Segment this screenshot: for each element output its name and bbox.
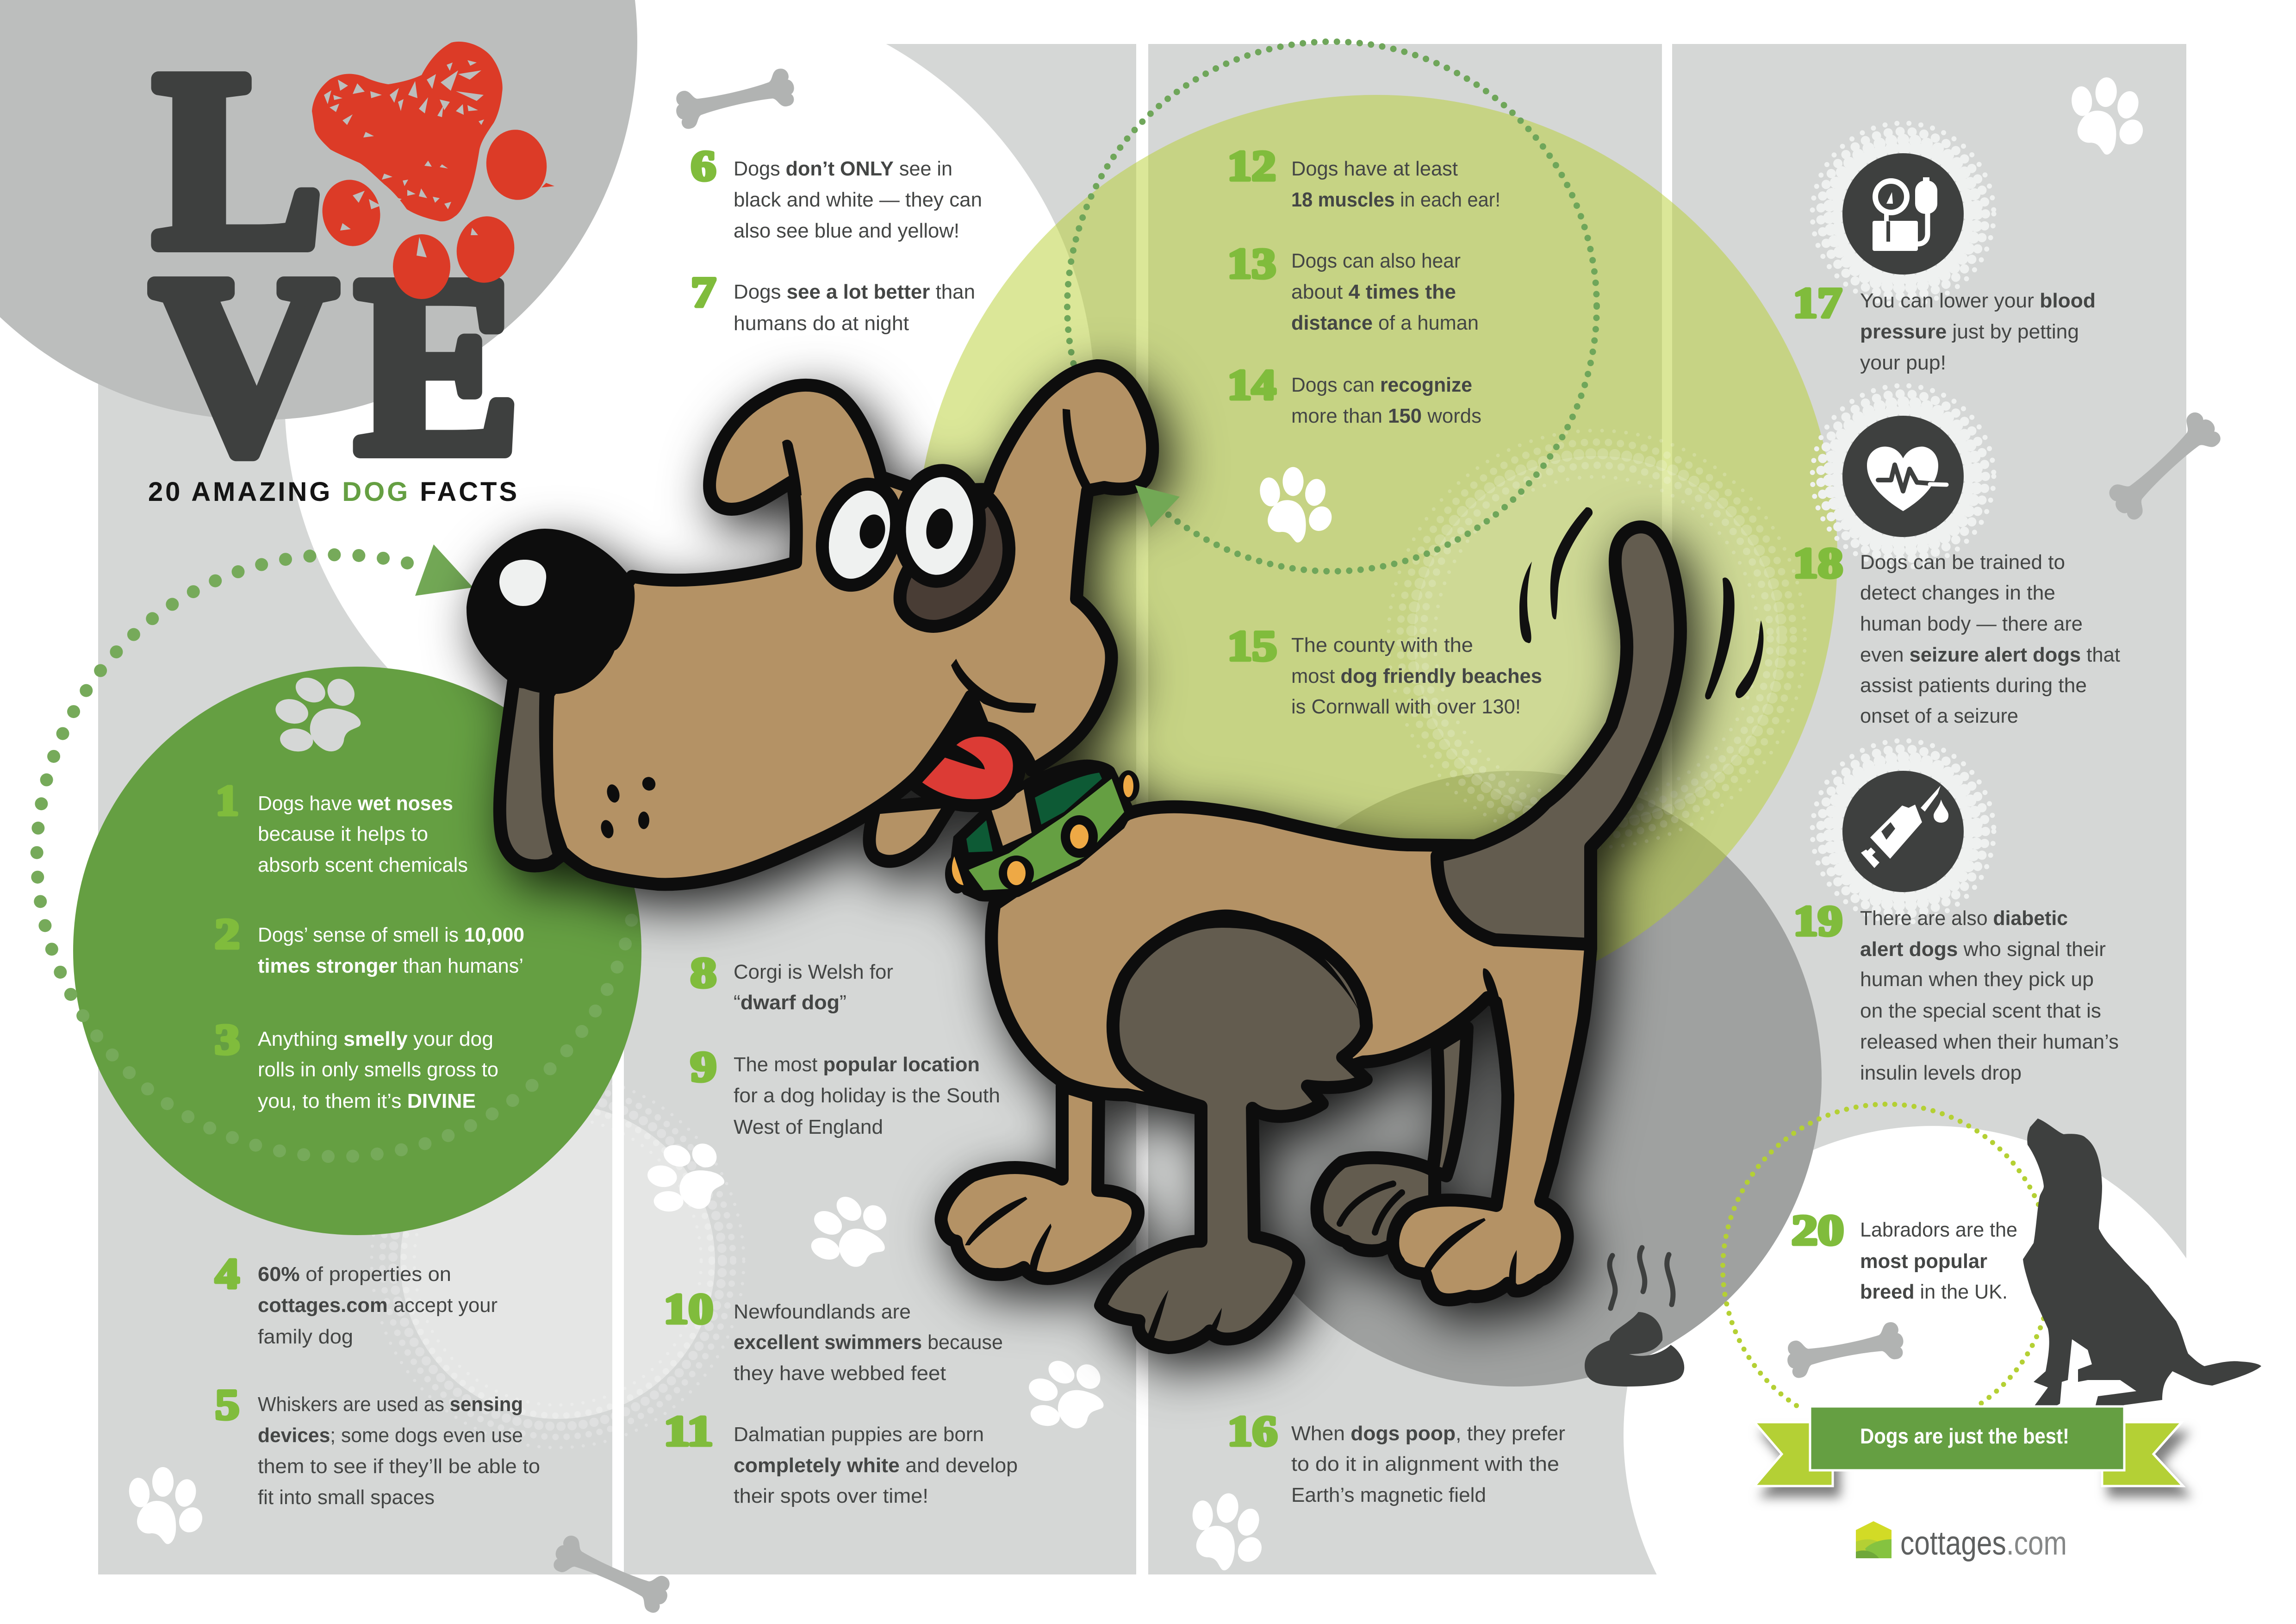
fact 8: 8: [691, 949, 716, 996]
fact 10: Newfoundlands are: [734, 1300, 911, 1323]
arrow: to nose: [415, 544, 473, 596]
fact 9: for a dog holiday is the South: [734, 1084, 1000, 1107]
dotted circle around fact 20: [1723, 1104, 2051, 1411]
collar: [945, 760, 1139, 901]
fact 7: [691, 269, 975, 335]
fact 6: also see blue and yellow!: [734, 219, 959, 242]
fact 12: 18 muscles in each ear!: [1291, 188, 1500, 211]
fact 4: [215, 1250, 498, 1348]
fact 18: assist patients during the: [1860, 674, 2087, 697]
panel: green facts circle: [73, 667, 641, 1235]
fact 4: 60% of properties on: [258, 1263, 451, 1286]
bones: [549, 66, 2226, 1616]
fact 18: Dogs can be trained to: [1860, 551, 2065, 574]
arrow: to ear: [1135, 485, 1180, 527]
fact 11: [664, 1407, 1018, 1507]
paw: below dog: [1017, 1343, 1117, 1444]
fact 18: human body — there are: [1860, 612, 2083, 635]
nose: [467, 529, 635, 694]
ear fold lines: [782, 409, 1095, 495]
fact 20: most popular: [1860, 1250, 1987, 1273]
paw: green circle: [266, 660, 372, 768]
fact 5: them to see if they’ll be able to: [258, 1455, 540, 1478]
fact 3: rolls in only smells gross to: [258, 1058, 498, 1081]
fact 1: [216, 777, 468, 876]
dotted arc to nose: [37, 555, 635, 1156]
fact 14: Dogs can recognize: [1291, 374, 1472, 396]
motion lines by tail: [1519, 507, 1763, 700]
fact 16: to do it in alignment with the: [1291, 1453, 1559, 1475]
fact 4: family dog: [258, 1325, 353, 1348]
paw: top right: [2066, 75, 2151, 157]
fact 15: most dog friendly beaches: [1291, 665, 1542, 687]
fact 6: [691, 142, 982, 242]
fact 17: your pup!: [1860, 351, 1946, 374]
fact 15: 15: [1227, 622, 1277, 669]
icon: blood pressure monitor: [1812, 123, 1994, 305]
fact 1: absorb scent chemicals: [258, 854, 468, 876]
front tan leg: [941, 1086, 1138, 1279]
fact 18: even seizure alert dogs that: [1860, 643, 2120, 666]
fact 13: [1227, 240, 1479, 334]
shoulder and front dark leg: [1101, 921, 1366, 1348]
fact 15: is Cornwall with over 130!: [1291, 695, 1521, 718]
fact 2: times stronger than humans’: [258, 955, 523, 977]
fact 19: released when their human’s: [1860, 1031, 2119, 1053]
fact 8: [691, 949, 893, 1014]
letter L: L: [154, 19, 323, 300]
fact 16: When dogs poop, they prefer: [1291, 1422, 1565, 1445]
fact 4: 4: [215, 1250, 239, 1297]
icon: sitting dog silhouette: [2023, 1118, 2261, 1411]
fact 18: [1793, 539, 2120, 727]
fact 13: distance of a human: [1291, 312, 1479, 334]
bone: fact 20: [1784, 1320, 1907, 1380]
front paw toes: [965, 1197, 1052, 1271]
paw: middle column upper: [641, 1131, 731, 1222]
eye patch: [900, 498, 1009, 626]
fact 10: they have webbed feet: [734, 1362, 946, 1385]
fact 5: 5: [215, 1381, 239, 1428]
eyes: [810, 467, 985, 595]
smile: [951, 659, 1036, 713]
fact 9: The most popular location: [734, 1053, 980, 1076]
letter V: V: [152, 224, 336, 505]
fact 5: fit into small spaces: [258, 1486, 435, 1509]
far paw toes: [1340, 1184, 1402, 1232]
halftone ring around tail: [1388, 431, 1805, 847]
halftone ring lower left: [372, 1075, 744, 1448]
jowl flap: [500, 681, 560, 866]
paw: ear facts: [1258, 467, 1336, 543]
fact 11: completely white and develop: [734, 1454, 1018, 1477]
fact 12: [1227, 142, 1500, 211]
fact 20: 20: [1792, 1206, 1844, 1254]
nostrils: [599, 775, 658, 840]
fact 19: There are also diabetic: [1860, 907, 2068, 930]
head with ears: [547, 366, 1152, 884]
rear paw toes and hip crease: [1424, 968, 1517, 1288]
fact 13: Dogs can also hear: [1291, 250, 1461, 272]
facts 12 to 16: [1227, 142, 1565, 1506]
fact 19: 19: [1793, 897, 1842, 944]
bone: right edge: [2103, 407, 2226, 525]
paw: middle column lower: [797, 1177, 904, 1285]
fact 17: 17: [1793, 279, 1842, 326]
fact 18: 18: [1793, 539, 1843, 587]
illustration: cartoon dog: [467, 366, 1680, 1348]
icon: poop with steam: [1585, 1248, 1684, 1387]
fact 14: more than 150 words: [1291, 405, 1481, 427]
fact 10: [664, 1285, 1003, 1385]
fact 2: 2: [215, 910, 240, 957]
letter E: E: [356, 225, 520, 506]
tongue: [913, 730, 1020, 806]
fact 19: alert dogs who signal their: [1860, 938, 2106, 961]
logo: cottages.com: [1856, 1521, 2067, 1562]
fact 20: [1792, 1206, 2017, 1303]
fact 5: [215, 1381, 540, 1509]
facts 1 to 3: [215, 777, 524, 1112]
fact 7: Dogs see a lot better than: [734, 281, 975, 303]
fact 8: “dwarf dog”: [734, 991, 846, 1014]
shoulder crescent and leg toes: [1120, 910, 1361, 1343]
fact 5: Whiskers are used as sensing: [258, 1393, 523, 1416]
facts 17 to 20: [1792, 279, 2120, 1303]
fact 7: 7: [691, 269, 716, 316]
fact 14: [1227, 361, 1481, 427]
fact 15: [1227, 622, 1542, 718]
fact 9: [691, 1043, 1000, 1138]
fact 12: Dogs have at least: [1291, 157, 1458, 180]
fact 7: humans do at night: [734, 312, 909, 335]
fact 16: 16: [1227, 1407, 1277, 1455]
icon: syringe and drop: [1812, 741, 1994, 922]
fact 15: The county with the: [1291, 634, 1473, 656]
fact 3: [215, 1016, 498, 1112]
mouth corner: [949, 696, 986, 741]
fact 8: Corgi is Welsh for: [734, 961, 893, 983]
paw: bottom centre: [1183, 1488, 1273, 1576]
fact 17: pressure just by petting: [1860, 320, 2079, 343]
fact 10: 10: [664, 1285, 713, 1332]
logo house mark: [1856, 1521, 1892, 1558]
banner: dogs are just the best: [1755, 1406, 2183, 1486]
logo wordmark: cottages.com: [1900, 1525, 2067, 1562]
fact 20: breed in the UK.: [1860, 1280, 2008, 1303]
fact 18: detect changes in the: [1860, 581, 2055, 604]
fact 2: Dogs’ sense of smell is 10,000: [258, 924, 524, 946]
heading: 20 amazing dog facts: 20 AMAZING DOG FACTS: [148, 477, 517, 507]
fact 4: cottages.com accept your: [258, 1294, 498, 1317]
fact 3: you, to them it’s DIVINE: [258, 1090, 476, 1112]
grey circle behind dog: [1206, 771, 1822, 1387]
fact 2: [215, 910, 524, 977]
bone: bottom: [549, 1532, 675, 1616]
fact 11: 11: [664, 1407, 713, 1455]
fact 16: Earth’s magnetic field: [1291, 1484, 1486, 1506]
body and rear leg: [991, 807, 1591, 1300]
fact 13: about 4 times the: [1291, 281, 1456, 303]
dotted circle around ear facts: [1067, 42, 1597, 571]
fact 9: 9: [691, 1043, 716, 1090]
fact 1: 1: [216, 777, 239, 824]
fact 11: their spots over time!: [734, 1485, 928, 1507]
fact 14: 14: [1227, 361, 1276, 408]
fact 19: human when they pick up: [1860, 968, 2094, 991]
fact 12: 12: [1227, 142, 1276, 189]
paw: bottom left: [127, 1467, 207, 1544]
fact 19: [1793, 897, 2119, 1084]
fact 5: devices; some dogs even use: [258, 1424, 523, 1447]
fact 17: [1793, 279, 2096, 374]
banner ribbon tails: [1755, 1422, 2183, 1486]
facts 4 and 5: [215, 1250, 540, 1509]
fact 19: insulin levels drop: [1860, 1062, 2022, 1084]
banner body: [1810, 1406, 2124, 1470]
fact 18: onset of a seizure: [1860, 705, 2018, 727]
fact 1: Dogs have wet noses: [258, 792, 453, 815]
far rear leg: [1317, 1028, 1467, 1251]
chin: [869, 801, 953, 862]
facts 6 to 11: [664, 142, 1018, 1507]
fact 16: [1227, 1407, 1565, 1506]
fact 10: excellent swimmers because: [734, 1331, 1003, 1354]
lime translucent circle: [915, 95, 1837, 1017]
fact 6: 6: [691, 142, 716, 189]
title: LOVE: [152, 19, 520, 506]
icon: heart with pulse: [1812, 386, 1994, 567]
banner text: Dogs are just the best!: [1860, 1424, 2069, 1448]
tail and hind patch: [1437, 527, 1680, 944]
fact 6: Dogs don’t ONLY see in: [734, 157, 952, 180]
bone: top: [672, 66, 798, 131]
fact 9: West of England: [734, 1116, 883, 1138]
fact 1: because it helps to: [258, 823, 428, 845]
fact 19: on the special scent that is: [1860, 999, 2101, 1022]
fact 11: Dalmatian puppies are born: [734, 1423, 984, 1446]
grey title circle: [0, 0, 637, 420]
fact 17: You can lower your blood: [1860, 289, 2096, 312]
fact 20: Labradors are the: [1860, 1218, 2017, 1241]
fact 6: black and white — they can: [734, 188, 982, 211]
icon: red paw print as O: [312, 42, 554, 299]
fact 3: Anything smelly your dog: [258, 1028, 493, 1050]
fact 3: 3: [215, 1016, 240, 1063]
fact 13: 13: [1227, 240, 1276, 287]
